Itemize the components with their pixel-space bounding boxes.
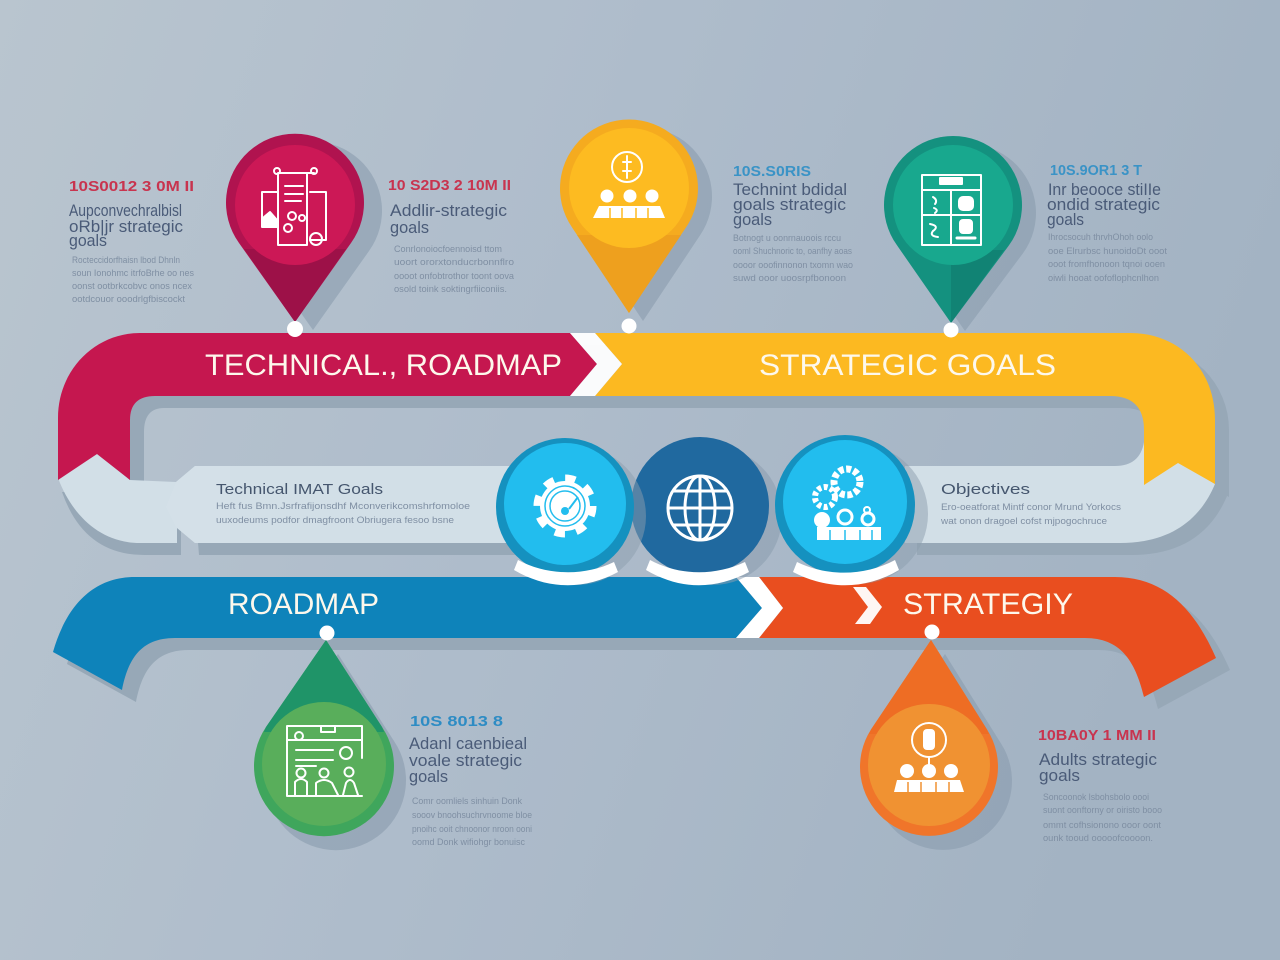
circle: people and gears	[775, 435, 928, 585]
band shadows	[62, 345, 1230, 709]
text block 6: ommt cofhsionono ooor oont	[1043, 820, 1161, 831]
text block 6: goals	[1039, 766, 1080, 785]
ribbon: technical goals	[58, 454, 520, 543]
text block 3: Technint bdidal	[733, 180, 847, 199]
icon: document and team	[287, 726, 362, 796]
text block 3: goals	[733, 210, 772, 229]
text block 5: oomd Donk wifiohgr bonuisc	[412, 837, 525, 848]
icon: globe	[668, 476, 732, 540]
ribbon: objectives	[905, 442, 1215, 543]
panel: technical goals text: Technical IMAT Goals	[216, 481, 383, 498]
text block 5: Adanl caenbieal	[409, 734, 527, 753]
panel: objectives text: wat onon dragoel cofst mjpogochruce	[940, 516, 1107, 527]
pin: teal	[884, 136, 1022, 323]
text block 2: uoort ororxtonducrbonnflro	[394, 257, 514, 268]
text block 4: oiwli hooat oofoflophcnlhon	[1048, 273, 1159, 284]
text block 6: ounk tooud ooooofcoooon.	[1043, 833, 1153, 844]
text block 5: voale strategic	[409, 751, 523, 770]
panel: objectives text	[940, 481, 1121, 527]
chevron: red to yellow	[570, 333, 622, 396]
icon: gears and team	[814, 469, 881, 540]
panel: objectives text: Ero-oeatforat Mintf conor Mrund Yorkocs	[941, 502, 1121, 513]
connector dots	[287, 318, 958, 640]
icon: gear	[538, 479, 592, 533]
text block 6: Adults strategic	[1039, 750, 1157, 769]
text block 4: ooot fromfhonoon tqnoi ooen	[1048, 259, 1165, 270]
text block 5: goals	[409, 767, 448, 786]
text block 1	[69, 179, 194, 305]
pin: orange	[860, 640, 998, 836]
band label: strategic goals: STRATEGIC GOALS	[759, 349, 1056, 382]
text block 2: 10 S2D3 2 10M II	[388, 178, 511, 194]
icon: team hierarchy	[894, 723, 964, 792]
text block 3: suwd ooor uoosrpfbonoon	[733, 273, 846, 284]
text block 2: goals	[390, 218, 429, 237]
text block 6	[1038, 728, 1162, 844]
circle: globe	[631, 437, 782, 585]
text block 5	[409, 714, 532, 848]
band: strategy	[759, 577, 1216, 697]
text block 1: oonst ootbrkcobvc onos ncex	[72, 281, 192, 292]
text block 5: Comr oomliels sinhuin Donk	[412, 796, 522, 807]
text block 3: 10S.S0RIS	[733, 164, 811, 180]
icon: team hierarchy	[593, 152, 665, 218]
text block 5: sooov bnoohsuchrvnoome bloe	[412, 810, 532, 821]
text block 4: ondid strategic	[1047, 195, 1160, 214]
text block 4: goals	[1047, 210, 1084, 229]
pin: yellow	[560, 120, 698, 313]
icon: documents	[262, 168, 326, 245]
band label: roadmap: ROADMAP	[228, 588, 379, 621]
crescent	[646, 560, 749, 585]
pin shadows	[244, 128, 1036, 850]
text block 1: goals	[69, 231, 107, 250]
text block 3: ooml Shuchnoric to, oanfhy aoas	[733, 246, 852, 257]
band label: strategy: STRATEGIY	[903, 588, 1073, 621]
text block 1: ootdcouor ooodrlgfbiscockt	[72, 294, 185, 305]
circle: gear	[496, 438, 646, 585]
band: strategic goals	[595, 333, 1215, 485]
chevron: small	[853, 587, 882, 624]
crescent	[793, 560, 899, 585]
crescent	[514, 560, 618, 585]
band: technical roadmap	[58, 333, 597, 480]
panel: objectives text: Objectives	[941, 481, 1030, 498]
text block 1: Aupconvechralbisl	[69, 201, 182, 220]
icon: grid board	[922, 175, 981, 245]
text block 2: oooot onfobtrothor toont oova	[394, 271, 515, 282]
text block 6: suont oonftorny or oiristo booo	[1043, 805, 1162, 816]
pin: green	[254, 640, 394, 836]
text block 4: ooe Elrurbsc hunoidoDt ooot	[1048, 246, 1167, 257]
text block 2: Conrlonoiocfoennoisd ttom	[394, 244, 502, 255]
text block 3: Botnogt u oonrnauoois rccu	[733, 233, 841, 244]
text block 5: pnoihc ooit chnoonor nroon ooni	[412, 824, 532, 835]
text block 6: 10BA0Y 1 MM II	[1038, 728, 1156, 744]
text block 1: 10S0012 3 0M II	[69, 179, 194, 195]
text block 6: Soncoonok lsbohsbolo oooi	[1043, 792, 1149, 803]
text block 2: osold toink soktingrfiiconiis.	[394, 284, 507, 295]
chevron: blue to orange	[736, 577, 783, 638]
band label: technical roadmap: TECHNICAL., ROADMAP	[205, 349, 562, 382]
panel: technical goals text	[216, 481, 470, 526]
text block 1: Rocteccidorfhaisn lbod Dhnln	[72, 255, 180, 266]
text block 3: goals strategic	[733, 195, 847, 214]
text block 2: Addlir-strategic	[390, 201, 508, 220]
text block 1: soun Ionohmc itrfoBrhe oo nes	[72, 268, 194, 279]
band: roadmap	[53, 577, 762, 690]
text block 4	[1047, 163, 1167, 284]
text block 4: 10S.9OR1 3 T	[1050, 163, 1142, 179]
text block 3: oooor ooofinnonon txomn wao	[733, 260, 853, 271]
text block 2	[388, 178, 515, 295]
text block 5: 10S 8013 8	[410, 714, 503, 730]
panel: technical goals text: uuxodeums podfor dmagfroont Obriugera fesoo bsne	[216, 515, 454, 526]
text block 3	[733, 164, 853, 284]
ribbon arrow head	[166, 466, 230, 543]
pin: red	[226, 134, 364, 322]
text block 1: oRb|jr strategic	[69, 217, 183, 236]
text block 4: Ihrocsocuh thrvhOhoh oolo	[1048, 232, 1153, 243]
panel: technical goals text: Heft fus Bmn.Jsrfrafijonsdhf Mconverikcomshrfomoloe	[216, 501, 470, 512]
text block 4: Inr beooce stiIIe	[1048, 180, 1161, 199]
